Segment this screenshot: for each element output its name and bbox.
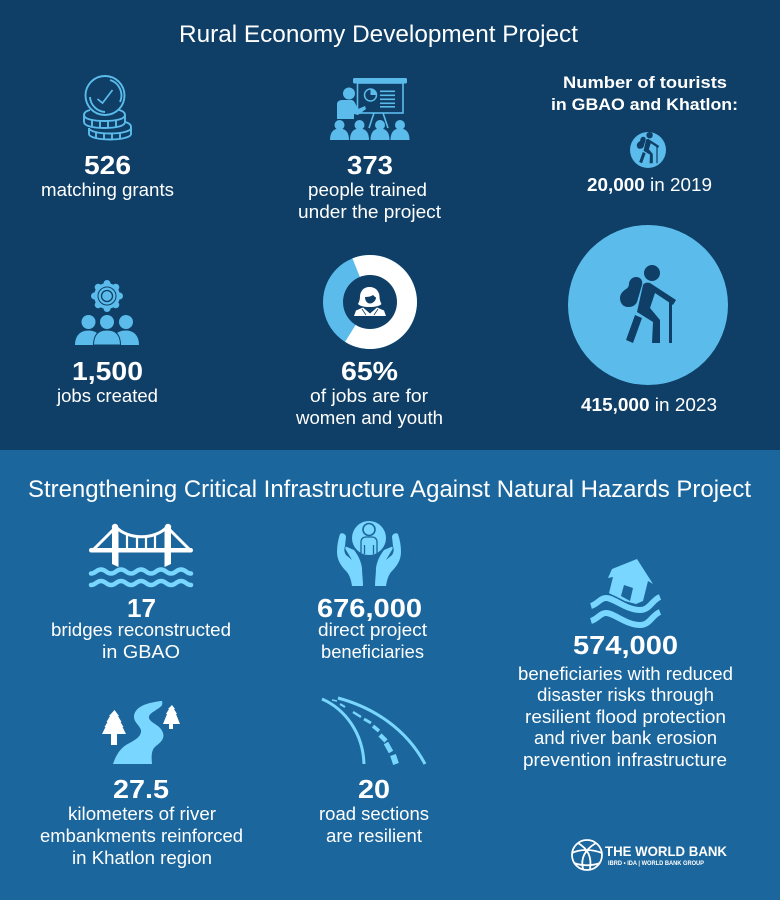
heading: critical infrastructure project: Strengthening Critical Infrastructure Against Natural Hazards Project [28,476,751,503]
stat: jobs for women and youth: of jobs are for [310,386,428,406]
stat: reduced disaster risks: beneficiaries with reduced [518,664,733,684]
icon: hands holding person [337,521,401,586]
logo: the world bank: IBRD • IDA | WORLD BANK GROUP [608,860,705,867]
stat: reduced disaster risks: prevention infrastructure [523,750,727,770]
logo: the world bank: THE WORLD BANK [605,843,727,859]
stat: people trained: 373 [347,150,393,180]
stat: matching grants: 526 [84,150,131,180]
stat: tourists 2023: 415,000 in 2023 [581,395,717,415]
icon: small hiker circle [630,132,666,168]
stat: bridges reconstructed: bridges reconstructed [51,620,231,640]
icon: flooded house [591,559,660,625]
stat: bridges reconstructed: in GBAO [102,642,180,662]
icon: curved road [322,698,425,764]
icon: coins with check [84,76,131,140]
stat: project beneficiaries: 676,000 [317,593,422,623]
icon: large hiker circle [568,225,728,385]
stat: road sections: 20 [358,774,390,804]
stat: people trained: under the project [298,202,441,222]
logo: the world bank [572,840,727,870]
stat: jobs for women and youth: 65% [341,356,398,386]
stat: reduced disaster risks [518,630,733,770]
stat: jobs created [56,356,158,406]
icon: bridge [89,524,193,585]
stat: river embankments: in Khatlon region [72,848,212,868]
stat: reduced disaster risks: 574,000 [573,630,678,660]
stat: river embankments: kilometers of river [68,804,216,824]
stat: project beneficiaries [317,593,427,662]
stat: jobs for women and youth [295,356,443,428]
stat: road sections: are resilient [326,826,422,846]
panel: critical infrastructure [0,450,780,900]
stat: people trained: people trained [308,180,427,200]
panel: rural economy [0,0,780,450]
stat: river embankments: embankments reinforced [40,826,243,846]
stat: reduced disaster risks: resilient flood protection [525,707,726,727]
icon: woman [354,287,386,316]
stat: jobs created: jobs created [56,386,158,406]
stat: river embankments [40,774,243,868]
stat: road sections: road sections [319,804,429,824]
stat: reduced disaster risks: disaster risks through [537,685,714,705]
stat: bridges reconstructed: 17 [127,593,156,623]
icon: presenter and audience [330,78,410,140]
stat: jobs created: 1,500 [72,356,143,386]
icon: globe [572,840,602,870]
stat: matching grants [41,150,174,200]
stat: tourists 2019: 20,000 in 2019 [587,175,712,195]
stat: matching grants: matching grants [41,180,174,200]
heading: number of tourists [551,73,738,114]
heading: rural economy project: Rural Economy Development Project [179,21,578,48]
icon: gear and team [75,283,139,345]
stat: project beneficiaries: beneficiaries [321,642,424,662]
stat: people trained [298,150,441,222]
chart: 65 percent donut [323,255,417,349]
stat: bridges reconstructed [51,593,231,662]
stat: jobs for women and youth: women and youth [295,408,443,428]
heading: number of tourists: in GBAO and Khatlon: [551,95,738,114]
stat: road sections [319,774,429,846]
heading: number of tourists: Number of tourists [563,73,727,92]
icon: river and trees [102,701,180,764]
stat: project beneficiaries: direct project [318,620,427,640]
stat: reduced disaster risks: and river bank erosion [534,728,717,748]
stat: river embankments: 27.5 [113,774,169,804]
